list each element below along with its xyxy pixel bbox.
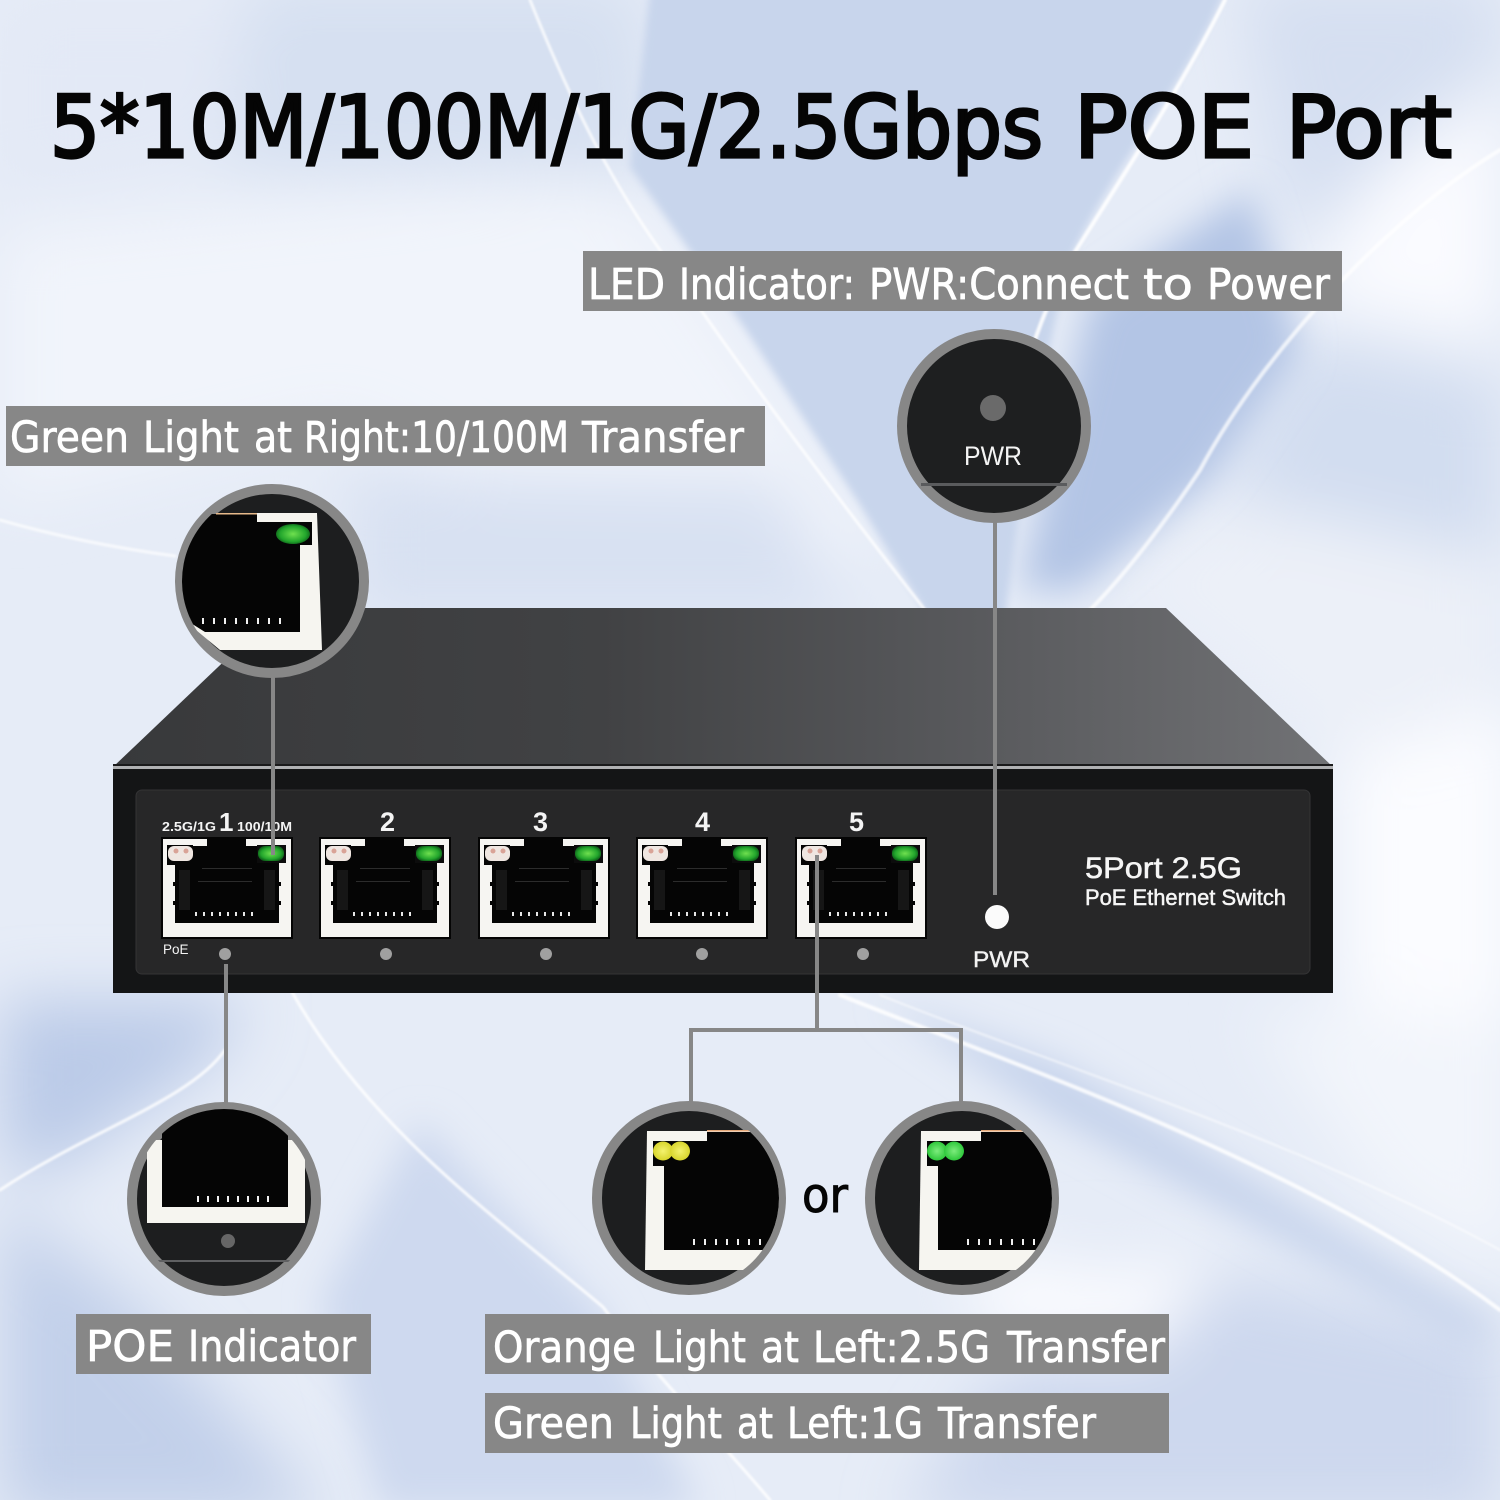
callout: PoE indicator zoom — [130, 1100, 320, 1291]
label: LED indicator: PWR:Connect — [869, 260, 1129, 310]
label: green light left: Left:1G — [787, 1399, 923, 1449]
port 1 labels: 1 — [219, 807, 233, 837]
label: LED indicator: LED — [588, 260, 665, 310]
callout: orange left LED zoom — [597, 1106, 790, 1290]
label: orange light: Left:2.5G — [813, 1323, 990, 1373]
port numbers 2-5: 3 — [533, 807, 548, 837]
label: orange light: at — [761, 1323, 799, 1373]
connector lines — [226, 520, 995, 1105]
label: green light right: Transfer — [581, 413, 744, 463]
label: green light left: Transfer — [937, 1399, 1096, 1449]
PWR indicator — [973, 905, 1030, 972]
label: green light right: at — [254, 413, 292, 463]
label: orange light: Orange — [493, 1323, 636, 1373]
callout: green right LED zoom — [170, 489, 364, 673]
callout: green left LED zoom — [870, 1106, 1064, 1290]
label: POE indicator: Indicator — [188, 1322, 356, 1372]
label: orange light: Light — [653, 1323, 746, 1373]
label: green light right: Right:10/100M — [304, 413, 569, 463]
label: green light right: Light — [143, 413, 239, 463]
label: green light right — [6, 406, 765, 466]
switch device — [113, 608, 1333, 993]
port 1 labels: PoE — [163, 942, 189, 957]
label: orange light: Transfer — [1006, 1323, 1165, 1373]
label: POE indicator: POE — [86, 1322, 174, 1372]
label: LED indicator: Power — [1207, 260, 1330, 310]
title: Port — [1286, 78, 1452, 178]
title: POE — [1074, 78, 1254, 178]
label: LED indicator: to — [1143, 260, 1193, 310]
label: green light left: Light — [630, 1399, 722, 1449]
text: or: or — [802, 1168, 848, 1224]
ethernet ports — [162, 838, 926, 938]
port 1 labels: 2.5G/1G — [162, 819, 216, 834]
port numbers 2-5 — [380, 807, 864, 837]
port numbers 2-5: 5 — [849, 807, 864, 837]
product name — [1085, 852, 1286, 910]
title: 5*10M/100M/1G/2.5Gbps — [50, 78, 1043, 178]
label: green light left: at — [737, 1399, 773, 1449]
PWR indicator: PWR — [973, 947, 1030, 972]
product name: PoE Ethernet Switch — [1085, 885, 1286, 910]
port 1 labels — [162, 807, 292, 957]
port 1 labels: 100/10M — [237, 819, 292, 834]
label: green light left: Green — [493, 1399, 614, 1449]
label: green light right: Green — [10, 413, 129, 463]
label: LED indicator — [583, 251, 1342, 311]
product name: 5Port 2.5G — [1085, 852, 1242, 885]
switch front panel — [113, 769, 1333, 993]
label: orange light — [485, 1314, 1169, 1374]
label: green light left — [485, 1393, 1169, 1453]
label: POE indicator — [76, 1314, 371, 1374]
port numbers 2-5: 4 — [695, 807, 710, 837]
PoE indicator dots — [219, 948, 869, 960]
label: LED indicator: Indicator: — [679, 260, 855, 310]
port numbers 2-5: 2 — [380, 807, 395, 837]
switch top cover — [113, 608, 1333, 767]
callout: PWR zoom — [902, 334, 1086, 518]
callout: PWR zoom: PWR — [964, 441, 1022, 471]
